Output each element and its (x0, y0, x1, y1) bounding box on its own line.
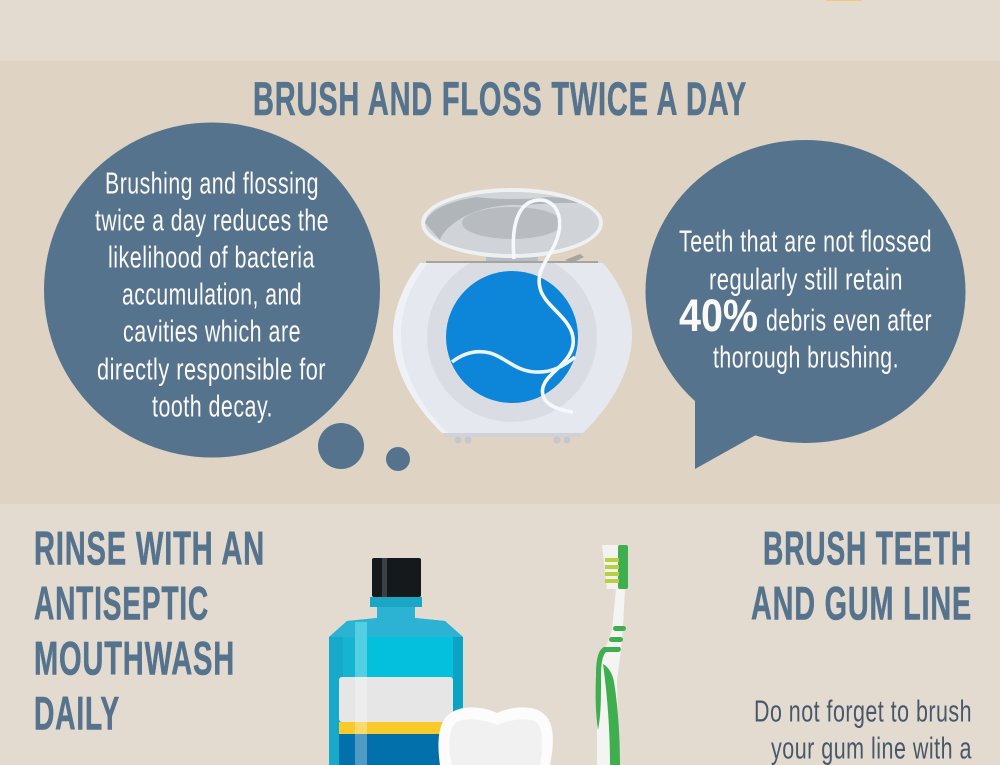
panel: brush and floss (0, 61, 1000, 504)
thought bubble text: likelihood of bacteria (108, 240, 315, 274)
thought bubble text: twice a day reduces the (95, 202, 329, 238)
thought bubble text: Brushing and flossing (105, 166, 319, 200)
thought bubble (44, 122, 410, 471)
speech bubble text: 40% (679, 290, 758, 341)
heading: rinse with mouthwash: DAILY (34, 686, 120, 740)
icon: toothbrush (596, 545, 628, 765)
speech bubble (646, 140, 966, 469)
speech bubble text: regularly still retain (709, 262, 903, 296)
text: gum line advice (754, 694, 972, 765)
heading: rinse with mouthwash: RINSE WITH AN (34, 522, 265, 574)
thought bubble text: tooth decay. (152, 388, 273, 424)
thought bubble text: accumulation, and (122, 276, 302, 312)
heading: rinse with mouthwash: MOUTHWASH (34, 632, 235, 684)
heading: rinse with mouthwash: ANTISEPTIC (34, 576, 209, 630)
speech bubble text (679, 224, 932, 374)
icon: tooth (438, 707, 553, 765)
thought bubble text (95, 166, 329, 424)
icon: mouthwash bottle (329, 558, 463, 765)
heading: rinse with mouthwash (34, 522, 265, 740)
thought bubble text: directly responsible for (97, 352, 326, 386)
speech bubble text: thorough brushing. (713, 340, 899, 374)
icon: dental floss box (393, 188, 632, 444)
heading: brush teeth and gum line (751, 522, 972, 630)
thought bubble text: cavities which are (123, 314, 301, 348)
